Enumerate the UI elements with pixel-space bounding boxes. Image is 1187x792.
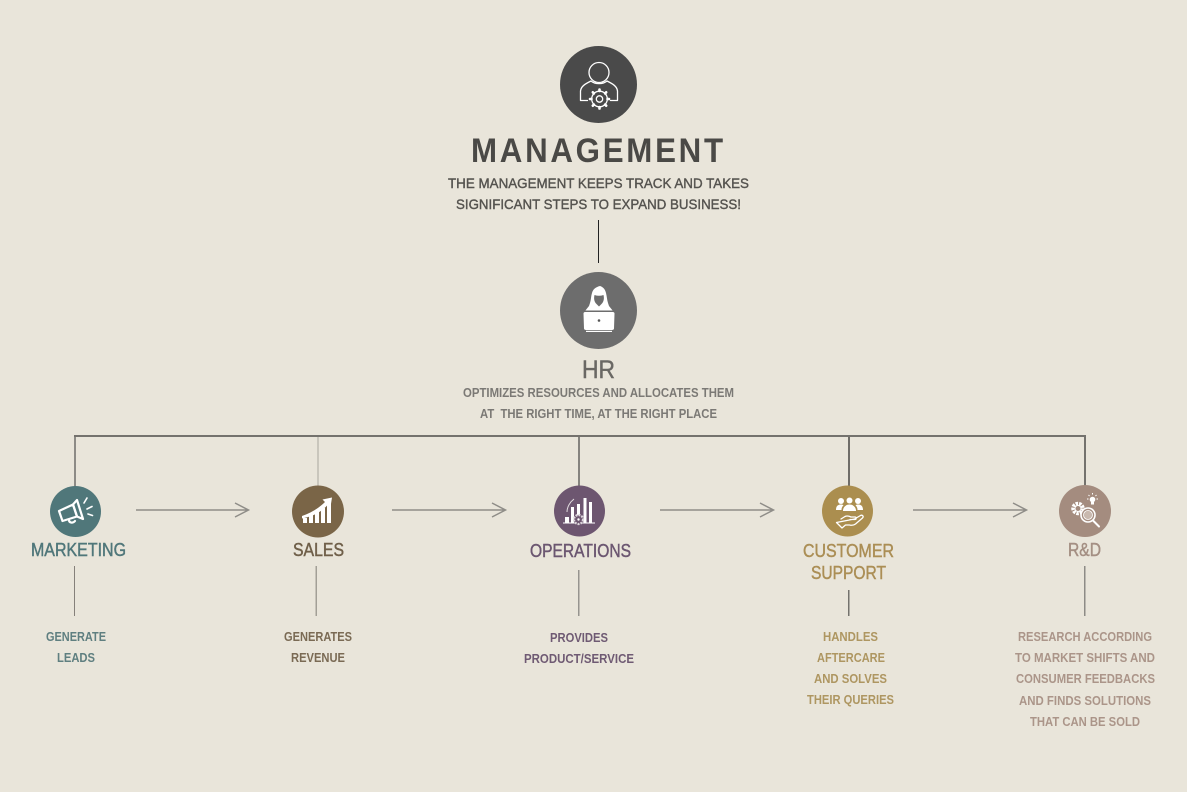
text block: R&D description: CONSUMER FEEDBACKS	[1016, 672, 1155, 686]
connector	[74, 566, 75, 616]
icon: bars with gear	[554, 486, 605, 536]
text block: customer support description	[807, 630, 894, 707]
label: customer support: SUPPORT	[811, 563, 886, 583]
text block: customer support description: HANDLES	[823, 630, 878, 644]
text block: customer support description: THEIR QUERIES	[807, 693, 894, 707]
icon: megaphone	[50, 486, 101, 537]
text block: sales description: GENERATES	[284, 630, 352, 644]
text block: operations description	[524, 631, 634, 666]
panel: R&D	[1015, 485, 1155, 729]
label: customer support	[803, 541, 894, 583]
text block: operations description: PRODUCT/SERVICE	[524, 652, 634, 666]
label: marketing: MARKETING	[31, 540, 126, 560]
arrow: customer support to R&D	[913, 503, 1026, 517]
heading: management: MANAGEMENT	[471, 131, 723, 169]
panel: sales	[284, 486, 352, 665]
text block: HR description: AT THE RIGHT TIME, AT THE RIGHT PLACE	[480, 406, 717, 421]
text block: HR description	[463, 385, 734, 421]
panel: operations	[524, 486, 634, 666]
arrow: marketing to sales	[136, 503, 248, 517]
text block: management description	[448, 175, 749, 212]
label: operations: OPERATIONS	[530, 541, 631, 561]
panel: customer support	[803, 486, 894, 707]
text block: marketing description	[46, 630, 106, 665]
label: sales: SALES	[293, 540, 344, 560]
icon: people over hand	[822, 486, 873, 536]
text block: management description: SIGNIFICANT STEPS TO EXPAND BUSINESS!	[456, 196, 741, 212]
arrow: sales to operations	[392, 503, 506, 517]
icon: manager with gear	[560, 46, 637, 123]
icon: gear, magnifier and bulb	[1059, 485, 1111, 537]
text block: management description: THE MANAGEMENT KEEPS TRACK AND TAKES	[448, 175, 749, 191]
text block: marketing description: GENERATE	[46, 630, 106, 644]
connector	[1084, 566, 1086, 616]
panel: HR	[463, 272, 734, 421]
text block: R&D description: TO MARKET SHIFTS AND	[1015, 651, 1155, 665]
text block: R&D description: RESEARCH ACCORDING	[1018, 630, 1152, 644]
connector	[848, 590, 850, 616]
arrow: operations to customer support	[660, 503, 774, 517]
text block: operations description: PROVIDES	[550, 631, 608, 645]
heading: HR: HR	[582, 356, 615, 384]
icon: rising bar chart	[292, 486, 344, 538]
text block: customer support description: AND SOLVES	[814, 672, 887, 686]
panel: marketing	[31, 486, 126, 665]
connector	[316, 566, 317, 616]
label: R&D: R&D	[1068, 540, 1101, 560]
panel: management	[448, 46, 749, 212]
connector: management to HR	[598, 220, 599, 263]
text block: sales description	[284, 630, 352, 665]
text block: R&D description	[1015, 630, 1155, 729]
connector	[578, 570, 580, 616]
icon: person at laptop	[560, 272, 637, 349]
text block: R&D description: AND FINDS SOLUTIONS	[1019, 694, 1151, 708]
text block: marketing description: LEADS	[57, 651, 95, 665]
text block: HR description: OPTIMIZES RESOURCES AND ALLOCATES THEM	[463, 385, 734, 400]
text block: R&D description: THAT CAN BE SOLD	[1030, 715, 1140, 729]
label: customer support: CUSTOMER	[803, 541, 894, 561]
text block: sales description: REVENUE	[291, 651, 345, 665]
text block: customer support description: AFTERCARE	[817, 651, 885, 665]
org chart connectors	[74, 435, 1086, 487]
